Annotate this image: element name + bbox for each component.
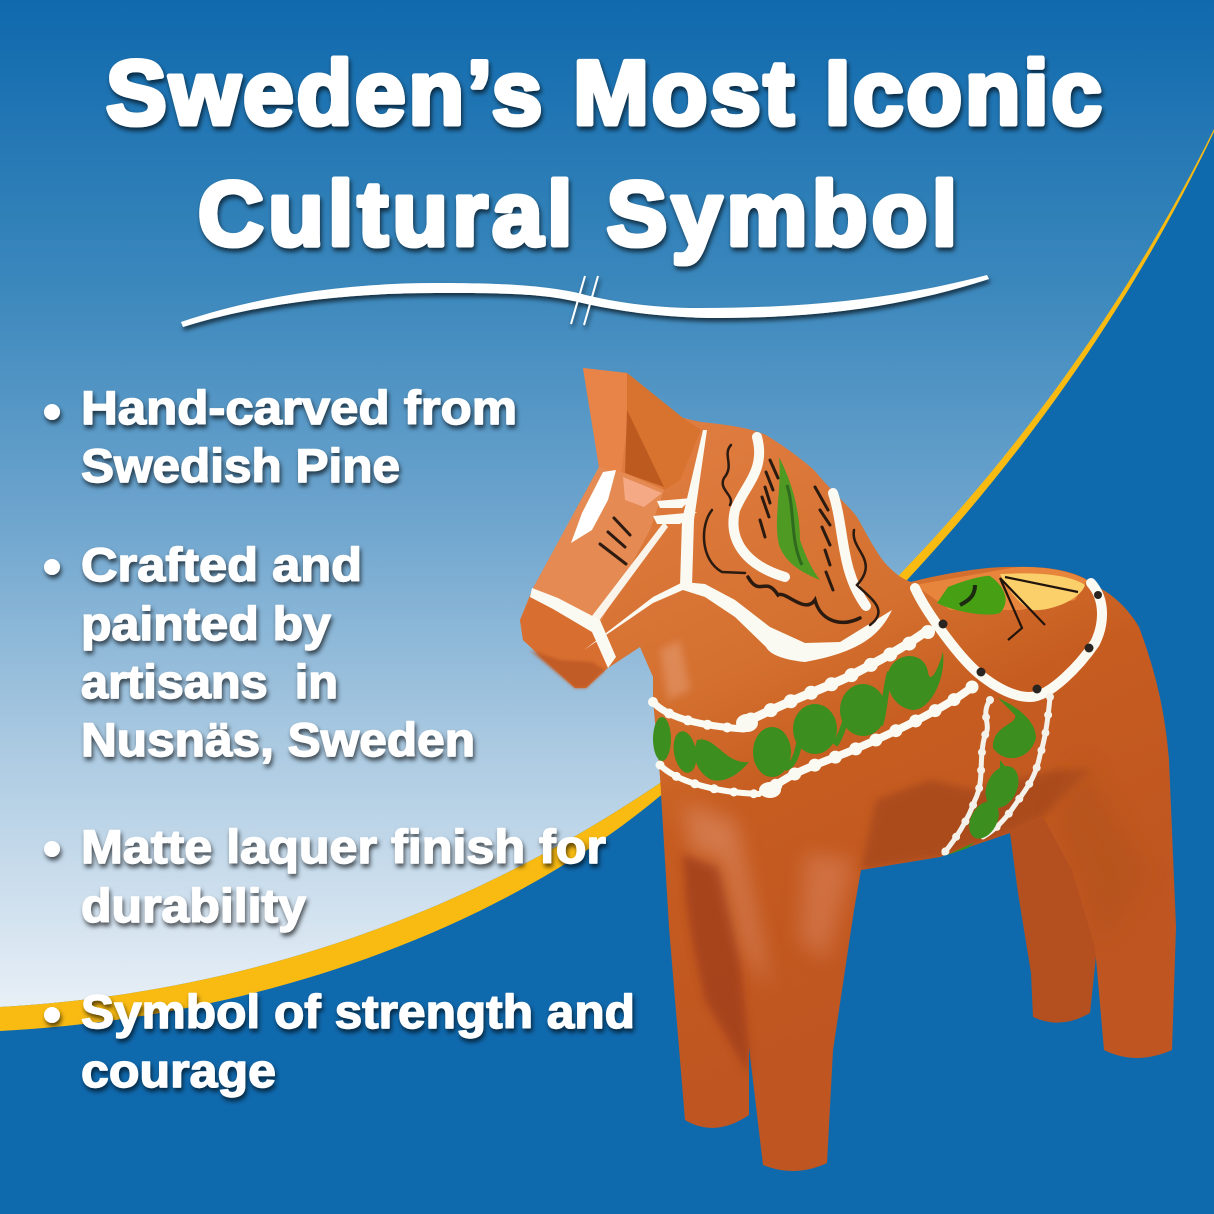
bullet: symbol [44, 985, 635, 1097]
chest strap [944, 697, 1050, 853]
bullet: matte: Matte laquer finish for [81, 820, 606, 873]
eye strokes [600, 518, 630, 564]
neck gloss [660, 640, 690, 700]
saddle outline [915, 583, 1102, 697]
bullet: crafted: Nusnäs, Sweden [81, 713, 475, 766]
front leg highlight [800, 853, 854, 960]
bullet: symbol: courage [81, 1044, 276, 1097]
belly plane [861, 770, 1090, 870]
yellow swoosh [0, 129, 1214, 1031]
horse figure [520, 368, 1176, 1171]
bullet: matte: durability [81, 879, 306, 932]
bullet list [44, 381, 635, 1097]
title divider [181, 275, 989, 327]
ear [583, 368, 701, 490]
chest strap green [945, 698, 1036, 856]
face [520, 467, 664, 688]
bullet: symbol: Symbol of strength and [81, 985, 635, 1038]
collar scallops [653, 630, 972, 794]
gap between front legs [683, 853, 749, 1075]
collar green wave [653, 652, 943, 781]
title [106, 43, 1102, 265]
bullet: crafted [44, 538, 475, 766]
black ornaments [704, 445, 878, 625]
bullet: hand-carved: Swedish Pine [81, 439, 400, 492]
bullet: crafted: Crafted and [81, 538, 362, 591]
title: Sweden’s Most Iconic [106, 43, 1102, 144]
far rear leg [1010, 810, 1097, 1023]
saddle dots [938, 591, 1102, 694]
mane strokes [733, 437, 866, 606]
neck wave [584, 582, 892, 662]
bridle [530, 430, 707, 668]
bullet: crafted: artisans in [81, 655, 338, 708]
near rear leg dark plane [1064, 784, 1131, 902]
bullet: hand-carved [44, 381, 517, 492]
horse body silhouette [520, 368, 1176, 1171]
title: Cultural Symbol [198, 164, 957, 265]
bullet: matte [44, 820, 606, 932]
bullet: hand-carved: Hand-carved from [81, 381, 517, 434]
horse shading [660, 640, 1147, 1075]
chest highlight [683, 803, 770, 990]
bullet: crafted: painted by [81, 597, 331, 650]
leaf [777, 457, 820, 580]
saddle painting [915, 567, 1087, 640]
blaze [571, 470, 616, 543]
collar end blobs [736, 714, 781, 798]
